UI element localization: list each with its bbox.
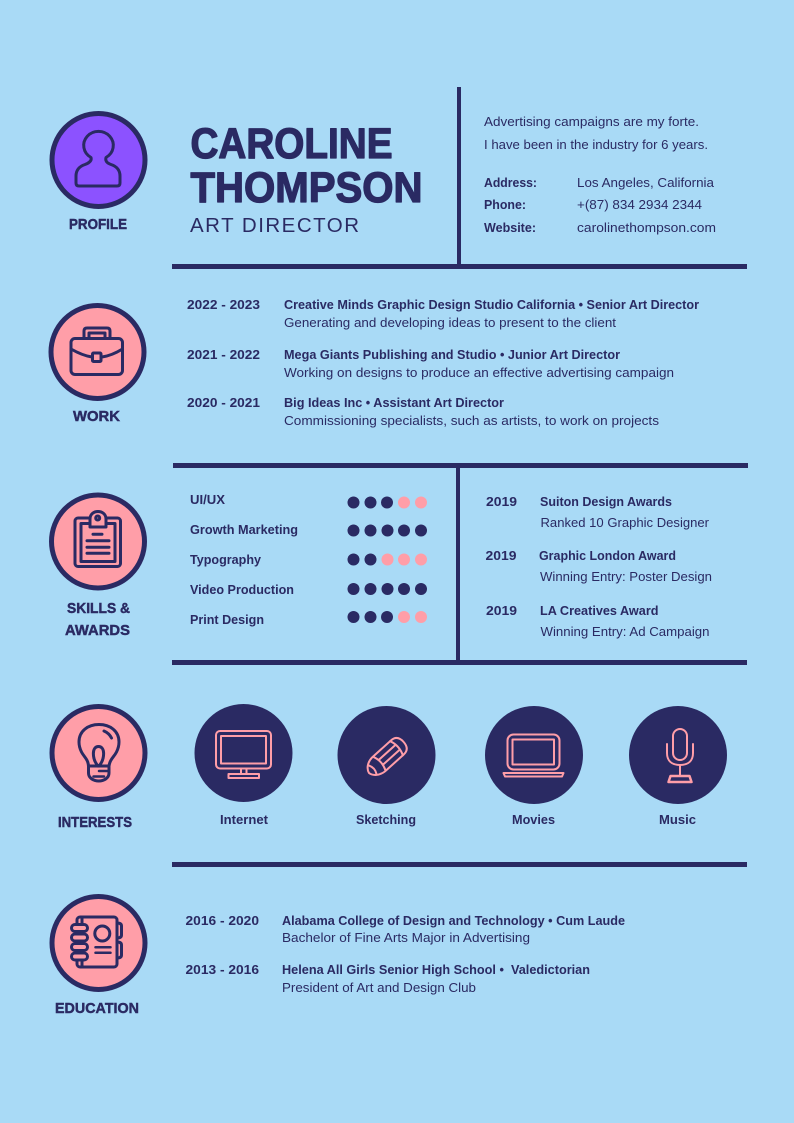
text block: awards: Suiton Design Awards	[540, 494, 672, 509]
panel: education label	[52, 896, 145, 1017]
interest: internet	[194, 704, 292, 827]
text block: education history: Helena All Girls Senior High School • Valedictorian	[282, 962, 590, 977]
panel: interest items	[194, 704, 727, 827]
text block: work history: Working on designs to produce an effective advertising campaign	[284, 365, 674, 380]
text block: awards: LA Creatives Award	[540, 603, 659, 618]
text block: education history	[186, 913, 625, 995]
title: name and role	[190, 121, 422, 237]
text block: contact details: Website:	[484, 220, 536, 235]
skill: UI/UX	[190, 492, 427, 508]
text block: introduction: Advertising campaigns are my forte.	[484, 114, 699, 129]
text block: contact details	[484, 175, 716, 235]
text block: contact details: +(87) 834 2934 2344	[577, 197, 702, 212]
text block: contact details: Address:	[484, 175, 537, 190]
skill: video production	[190, 582, 427, 597]
text block: education history: Alabama College of Design and Technology • Cum Laude	[282, 913, 625, 928]
text block: work history: 2022 - 2023	[187, 297, 260, 312]
icon: light bulb	[52, 706, 145, 800]
heading: skills and awards: AWARDS	[65, 622, 130, 639]
icon: notebook	[52, 896, 145, 990]
skill: video production: Video Production	[190, 582, 294, 597]
icon: profile person	[52, 114, 145, 206]
heading: education: EDUCATION	[55, 1000, 139, 1017]
skill: typography	[190, 552, 427, 567]
text block: work history: 2020 - 2021	[187, 395, 260, 410]
interest: sketching: Sketching	[356, 812, 416, 827]
text block: awards: Winning Entry: Poster Design	[540, 569, 712, 584]
skill: UI/UX: UI/UX	[190, 492, 225, 507]
panel: work label	[51, 306, 144, 425]
text block: work history: Generating and developing ideas to present to the client	[284, 315, 616, 330]
heading: skills and awards: SKILLS &	[67, 600, 130, 617]
chart: skill ratings	[190, 492, 427, 627]
text block: work history	[187, 297, 699, 428]
text block: contact details: Los Angeles, California	[577, 175, 715, 190]
text block: awards: 2019	[486, 548, 516, 563]
text block: work history: Big Ideas Inc • Assistant Art Director	[284, 395, 504, 410]
interest: internet: Internet	[220, 812, 269, 827]
title: name and role: CAROLINE	[190, 121, 392, 168]
text block: contact details: Phone:	[484, 197, 526, 212]
text block: work history: Commissioning specialists, such as artists, to work on projects	[284, 413, 660, 428]
heading: skills and awards	[65, 600, 130, 639]
skill: typography: Typography	[190, 552, 262, 567]
interest: music: Music	[659, 812, 696, 827]
interest: music	[629, 706, 727, 827]
title: name and role: THOMPSON	[190, 165, 422, 212]
text block: introduction: I have been in the industry for 6 years.	[484, 137, 708, 152]
text block: work history: 2021 - 2022	[187, 347, 260, 362]
text block: awards: Graphic London Award	[539, 548, 676, 563]
heading: work: WORK	[73, 408, 120, 425]
text block: awards: Ranked 10 Graphic Designer	[540, 515, 710, 530]
icon: briefcase	[51, 306, 144, 398]
panel: skills and awards label	[52, 495, 144, 639]
text block: awards: 2019	[486, 494, 517, 509]
heading: interests: INTERESTS	[58, 814, 132, 831]
text block: awards: 2019	[486, 603, 517, 618]
text block: work history: Mega Giants Publishing and Studio • Junior Art Director	[284, 347, 620, 362]
title: name and role: ART DIRECTOR	[190, 214, 359, 237]
heading: profile: PROFILE	[69, 216, 127, 233]
text block: education history: President of Art and Design Club	[282, 980, 476, 995]
text block: awards	[486, 494, 712, 639]
interest: sketching	[338, 706, 436, 827]
text block: work history: Creative Minds Graphic Design Studio California • Senior Art Director	[284, 297, 699, 312]
interest: movies: Movies	[512, 812, 555, 827]
panel: interests label	[52, 706, 145, 831]
text block: education history: 2013 - 2016	[186, 962, 259, 977]
interest: movies	[485, 706, 583, 827]
text block: contact details: carolinethompson.com	[577, 220, 716, 235]
text block: education history: 2016 - 2020	[186, 913, 259, 928]
icon: clipboard	[52, 495, 144, 588]
skill: growth marketing	[190, 522, 427, 537]
skill: growth marketing: Growth Marketing	[190, 522, 298, 537]
skill: print design: Print Design	[190, 612, 264, 627]
text block: education history: Bachelor of Fine Arts Major in Advertising	[282, 930, 530, 945]
text block: awards: Winning Entry: Ad Campaign	[540, 624, 710, 639]
skill: print design	[190, 611, 427, 627]
text block: introduction	[484, 114, 708, 152]
panel: profile	[52, 114, 145, 233]
